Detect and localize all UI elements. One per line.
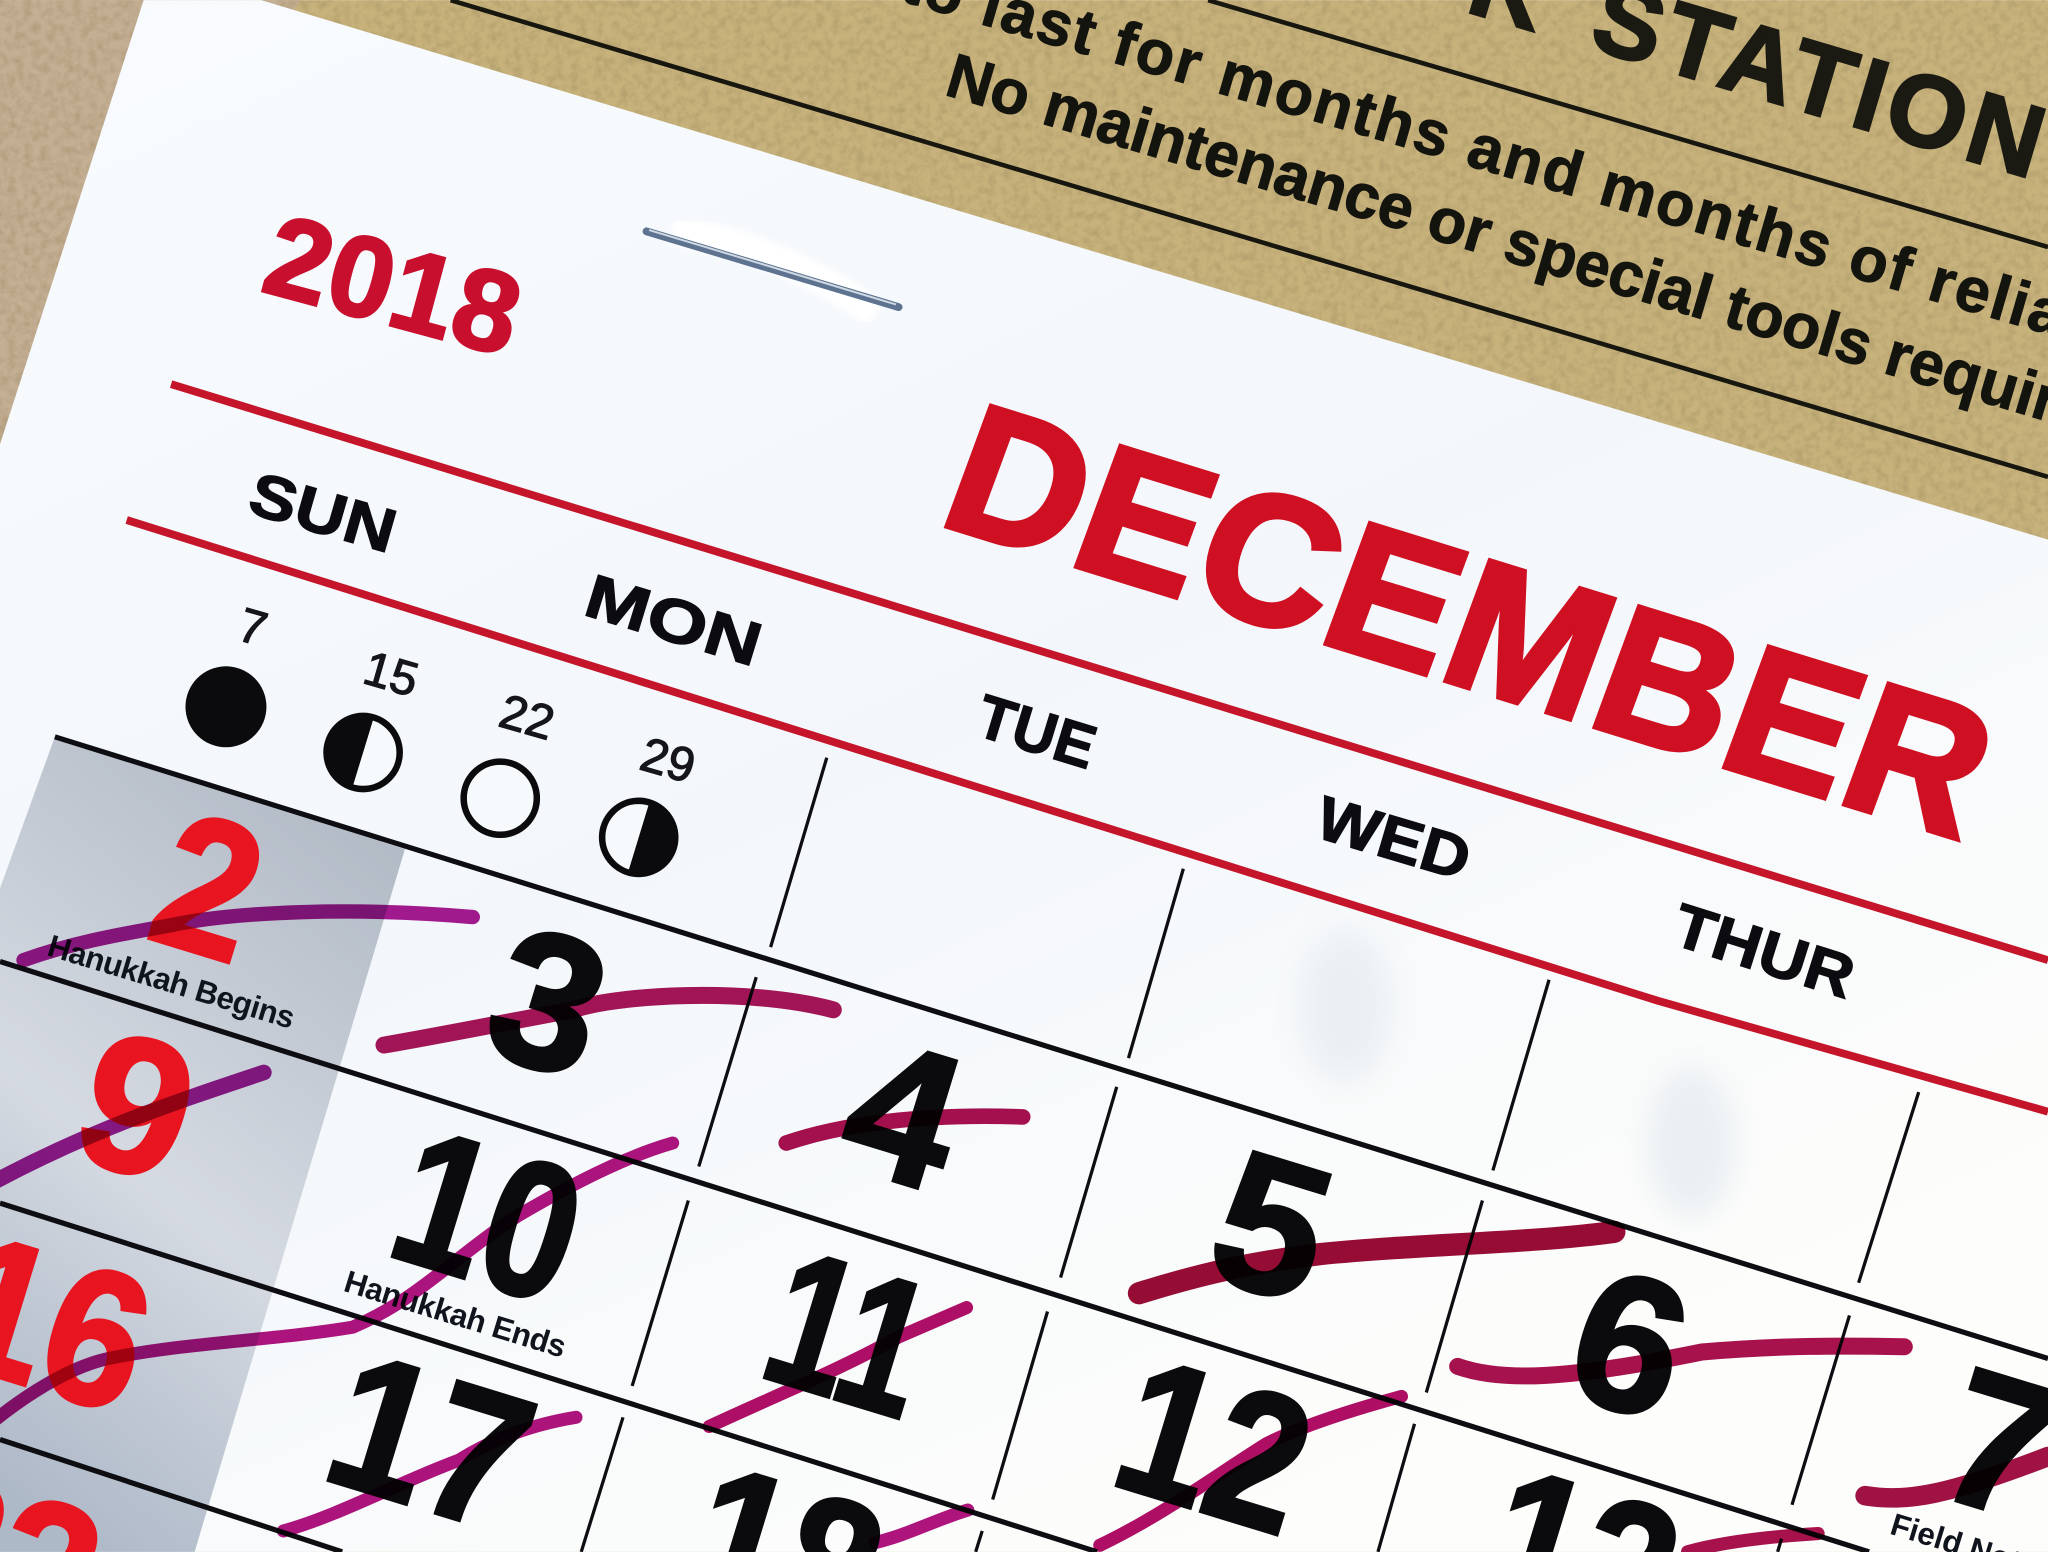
strike: 6	[1458, 1346, 1904, 1376]
moon: last quarter, 29	[602, 727, 701, 885]
black dates	[305, 883, 2048, 1552]
date 4: 4	[821, 995, 987, 1233]
moon: first quarter, 15	[316, 641, 424, 789]
date 9: 9	[54, 987, 220, 1225]
strike: 4	[786, 1116, 1023, 1143]
month heading: DECEMBER	[921, 366, 2019, 878]
strike: 18	[875, 1510, 968, 1543]
moon: new, 7: 7	[232, 598, 273, 657]
date 11: 11	[743, 1207, 954, 1459]
moon: full, 22	[464, 684, 560, 835]
moon: last quarter, 29: 29	[635, 727, 701, 794]
strike: 17	[283, 1417, 576, 1531]
moon: first quarter, 15: 15	[358, 641, 424, 708]
cardboard rule upper	[1208, 0, 2048, 247]
date 5: 5	[1189, 1107, 1355, 1345]
date 10: 10	[370, 1086, 606, 1345]
ghost show-through marks	[1301, 930, 1736, 1219]
strike: 7	[1865, 1456, 2048, 1498]
MON: MON	[577, 561, 770, 680]
THUR: THUR	[1665, 891, 1863, 1012]
date 6: 6	[1547, 1225, 1713, 1463]
strike: 11	[709, 1308, 967, 1426]
date 2: 2	[131, 769, 287, 1004]
strike: 2	[24, 912, 473, 960]
strike: 3	[384, 995, 833, 1045]
TUE: TUE	[969, 682, 1104, 783]
strike: 10 and 16	[0, 1143, 673, 1421]
moon phases	[185, 598, 701, 885]
WED: WED	[1309, 783, 1479, 894]
moon: new, 7	[185, 598, 273, 747]
calendar grid	[0, 737, 2048, 1552]
date 3: 3	[465, 883, 631, 1121]
weekday labels	[242, 459, 1863, 1012]
strike: 5	[1139, 1232, 1614, 1293]
strike: 9	[0, 1072, 264, 1182]
year 2018: 2018	[252, 191, 534, 381]
strike: 13	[1688, 1534, 1818, 1552]
note: Hanukkah Ends: Hanukkah Ends	[340, 1264, 570, 1365]
strike: 12	[1100, 1396, 1401, 1545]
holiday notes	[44, 928, 2048, 1552]
marker strike-throughs	[0, 912, 2048, 1552]
sunday red dates	[0, 769, 287, 1552]
sunday shaded column	[0, 737, 405, 1552]
header red rules	[127, 384, 2048, 1112]
moon: full, 22: 22	[494, 684, 560, 751]
cardboard rule lower	[451, 0, 2048, 477]
cardboard printed panel	[451, 0, 2048, 477]
SUN: SUN	[242, 459, 404, 567]
note: Hanukkah Begins: Hanukkah Begins	[44, 928, 299, 1036]
staple	[647, 230, 899, 314]
